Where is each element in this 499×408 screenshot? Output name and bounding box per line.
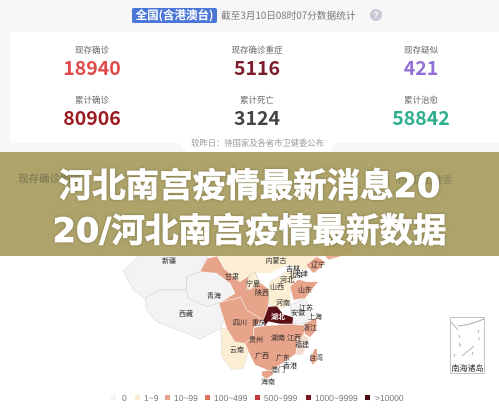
map labels: 青海	[207, 291, 221, 301]
stat: total deaths: 累计死亡	[240, 94, 274, 106]
province: Heilongjiang Jilin	[320, 243, 353, 260]
stat: total cured: 累计治愈	[404, 94, 438, 106]
province: Zhejiang	[304, 317, 317, 337]
map labels: 新疆	[162, 256, 176, 266]
stat: current suspected: 现存疑似	[404, 44, 438, 56]
icon: help	[370, 9, 382, 21]
map labels: 广西	[255, 351, 269, 361]
map labels: 宁夏	[246, 279, 260, 289]
map labels: 河北	[280, 275, 294, 285]
legend	[111, 393, 404, 403]
map labels: 重庆	[252, 318, 266, 328]
South China Sea inset	[450, 318, 484, 374]
top background	[0, 0, 499, 152]
map labels: 辽宁	[311, 260, 325, 270]
map labels: 湖南	[271, 333, 285, 343]
map labels: 西藏	[179, 309, 193, 319]
map labels: 福建	[295, 340, 309, 350]
map labels: 贵州	[249, 335, 263, 345]
map labels: 广东	[276, 353, 290, 363]
map labels: 陕西	[255, 288, 269, 298]
title banner	[0, 152, 499, 256]
map labels: 安徽	[291, 308, 305, 318]
title: 20/河北南宫疫情最新数据	[53, 211, 446, 250]
map labels: 上海	[308, 312, 322, 322]
faded source note: 市地区卫健委	[395, 172, 452, 186]
South China Sea inset: 南海诸岛	[452, 363, 484, 374]
stat: total deaths: 3124	[234, 102, 280, 131]
legend: >10000	[375, 393, 404, 403]
map labels: 江苏	[299, 303, 313, 313]
map labels: 海南	[261, 377, 275, 387]
map labels: 河南	[276, 298, 290, 308]
province: Yunnan	[221, 328, 248, 370]
map labels: 吉林	[286, 264, 300, 274]
map labels	[162, 256, 325, 387]
province: Hubei	[263, 306, 293, 326]
map labels: 香港	[283, 361, 297, 371]
stat: current severe: 现存确诊重症	[231, 44, 282, 56]
map labels: 天津	[294, 269, 308, 279]
province: Ningxia Shanxi Hebei Henan	[247, 272, 260, 290]
legend: 10~99	[174, 393, 198, 403]
map labels: 山西	[270, 282, 284, 292]
stat: current severe: 5116	[234, 52, 280, 81]
title: 河北南宫疫情最新消息20	[59, 166, 440, 205]
stat: total cured: 58842	[392, 102, 450, 131]
map labels: 山东	[298, 285, 312, 295]
map labels: 甘肃	[225, 272, 239, 282]
map labels: 四川	[233, 318, 247, 328]
province: Taiwan	[310, 348, 317, 365]
legend: 1~9	[144, 393, 159, 403]
legend: 100~499	[214, 393, 248, 403]
province: Tibet	[145, 290, 224, 339]
legend: 1000~9999	[315, 393, 358, 403]
province: Hainan	[262, 370, 274, 379]
map labels: 台湾	[309, 353, 323, 363]
map labels: 江西	[287, 333, 301, 343]
legend: 500~999	[264, 393, 298, 403]
province: Liaoning	[306, 257, 325, 273]
comparison note pill: 较昨日：待国家及各省市卫健委公布	[191, 137, 324, 149]
province: Fujian	[296, 335, 309, 355]
province: Xinjiang	[123, 247, 207, 298]
update time: 截至3月10日08时07分数据统计	[221, 8, 356, 22]
stat: current suspected: 421	[404, 52, 438, 81]
map labels: 湖北	[271, 312, 285, 322]
province: Inner Mongolia and north	[217, 243, 333, 282]
stat: total confirmed: 累计确诊	[75, 94, 109, 106]
map labels: 浙江	[303, 323, 317, 333]
map labels: 澳门	[271, 365, 285, 375]
comparison note pill	[180, 134, 335, 152]
legend: 0	[122, 393, 127, 403]
icon: help: ?	[373, 10, 379, 20]
province: Gansu and Shaanxi	[200, 256, 270, 320]
map labels: 内蒙古	[266, 256, 286, 266]
province: Jiangsu Anhui blank	[290, 298, 312, 323]
stat: total confirmed: 80906	[63, 102, 121, 131]
province: Qinghai	[187, 272, 241, 307]
stat: current confirmed: 18940	[63, 52, 121, 81]
province: South central	[245, 324, 304, 372]
panel: statistics	[10, 32, 499, 143]
province: Sichuan	[219, 297, 263, 343]
title	[53, 166, 446, 250]
region tag: 全国(含港澳台)	[136, 7, 213, 23]
stat: current confirmed: 现存确诊	[75, 44, 109, 56]
province: Shandong	[290, 279, 318, 300]
map labels: 云南	[230, 345, 244, 355]
faded chart heading: 现存确诊地图	[18, 171, 81, 186]
map labels: 北京	[289, 270, 303, 280]
